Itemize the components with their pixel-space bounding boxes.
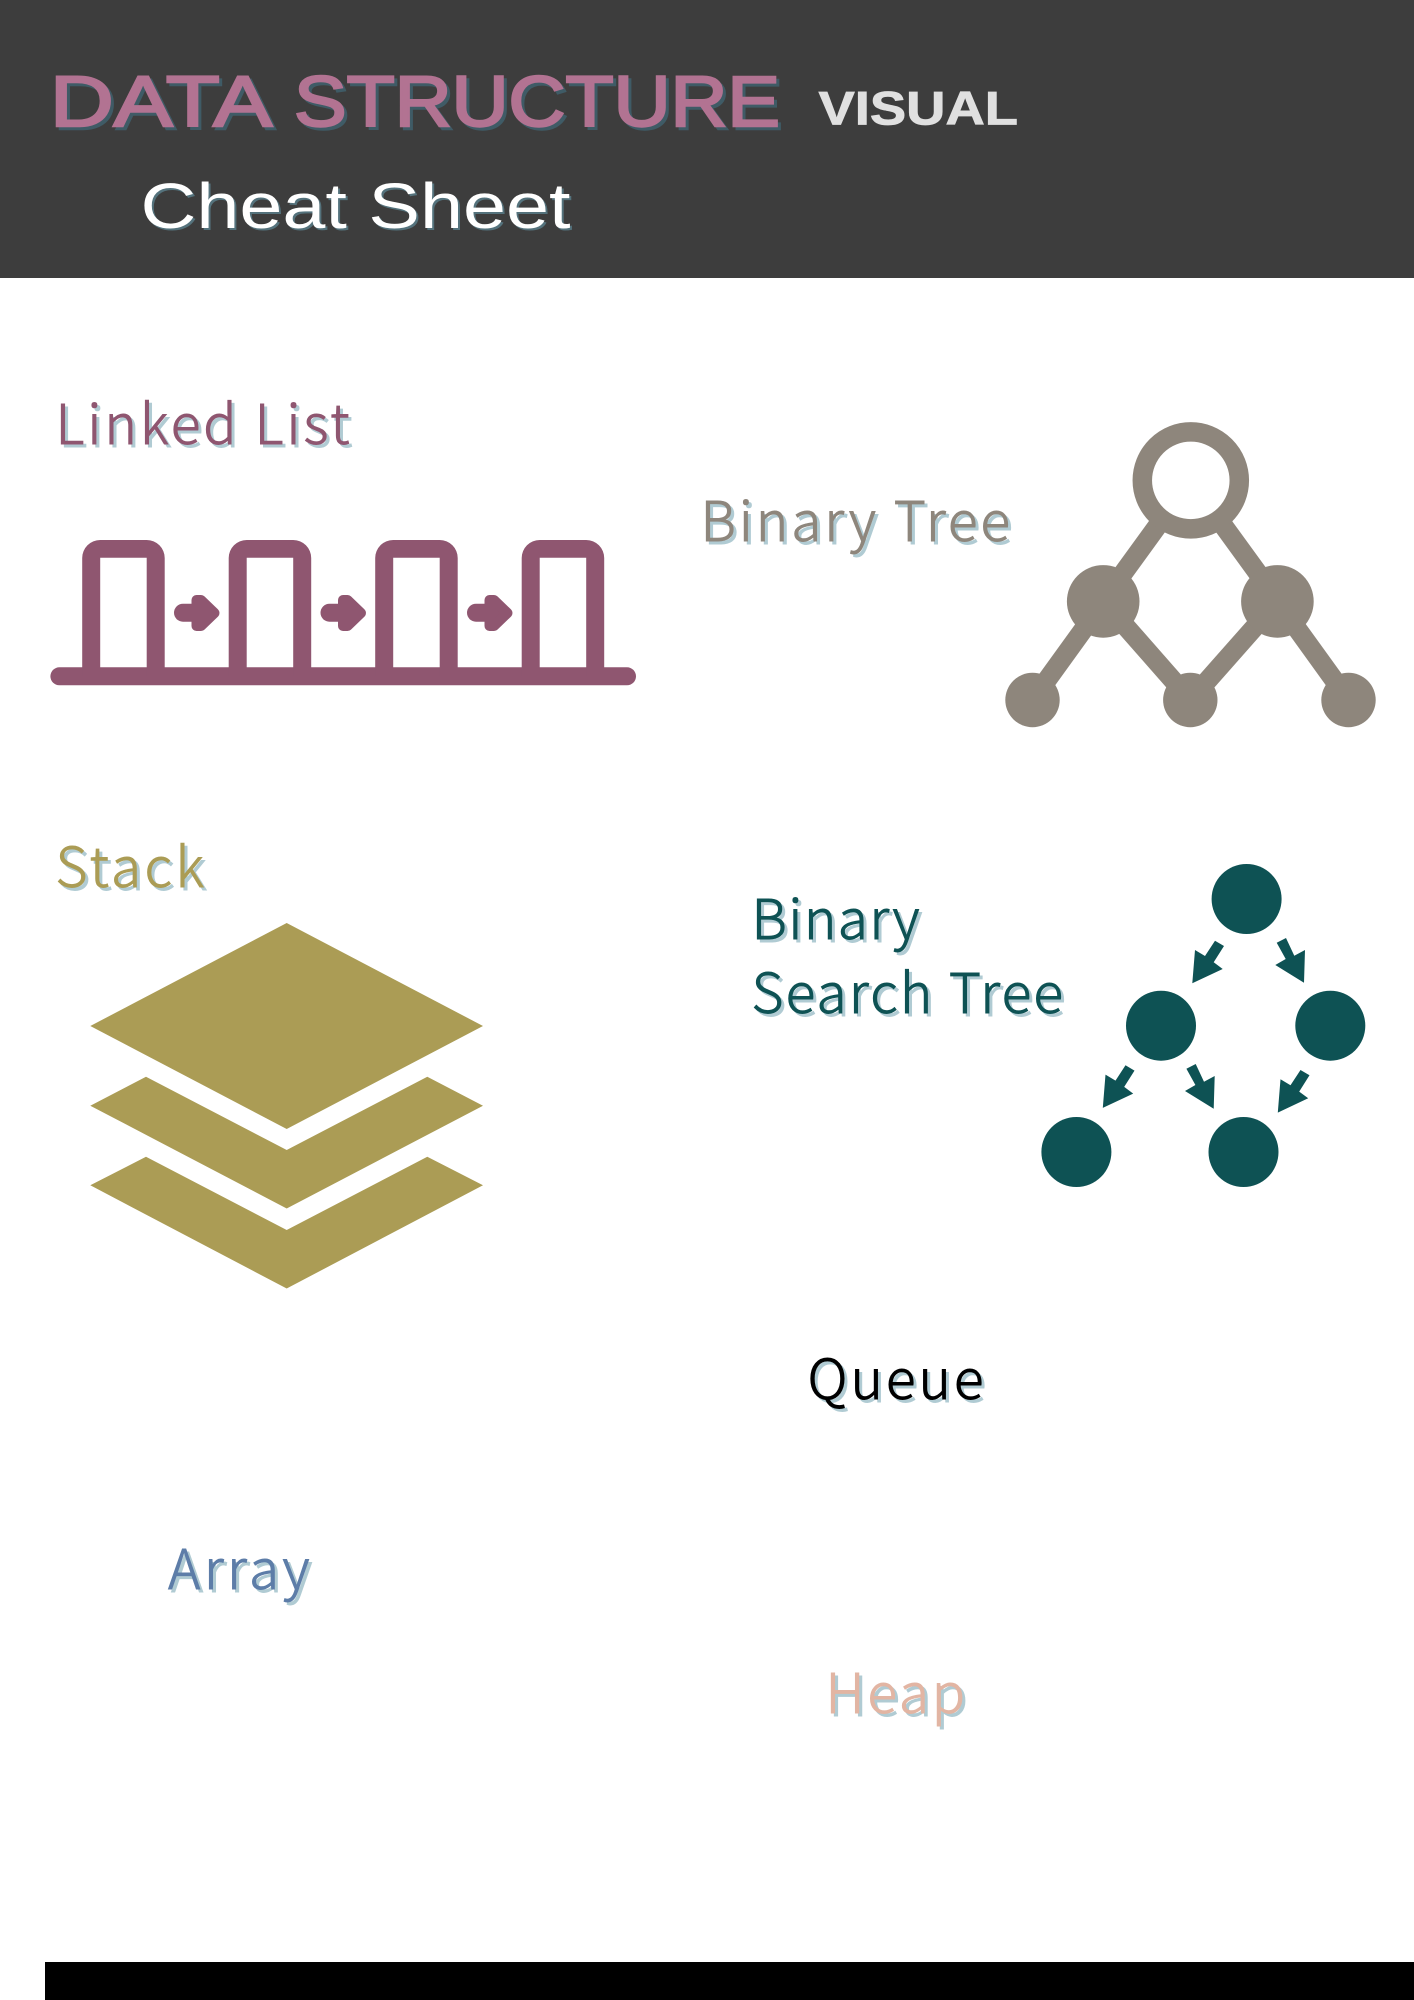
heading: binary tree: Binary Tree	[700, 477, 1010, 557]
heading: linked list: Linked List	[56, 380, 350, 460]
title: visual: VISUAL	[818, 82, 1018, 134]
heading: heap: Heap	[826, 1649, 965, 1729]
title: data structure: STRUCTURE	[294, 63, 780, 142]
heading: array: Array	[168, 1525, 310, 1605]
heading: stack: Stack	[56, 823, 204, 903]
heading: binary search tree: Search Tree	[752, 949, 1063, 1029]
icon: binary search tree	[1041, 864, 1365, 1187]
icon: binary tree	[1005, 432, 1376, 727]
subtitle: cheat sheet: Cheat Sheet	[140, 170, 571, 242]
title: data structure	[50, 63, 780, 142]
heading: binary search tree: Binary	[752, 875, 920, 955]
icon: linked list	[50, 540, 636, 685]
heading: queue: Queue	[808, 1335, 984, 1415]
footer bar	[45, 1962, 1414, 2000]
title: data structure: DATA	[50, 63, 273, 142]
header band	[0, 0, 1414, 278]
heading: binary search tree	[752, 875, 1063, 1029]
icon: stack of layers	[90, 923, 483, 1288]
